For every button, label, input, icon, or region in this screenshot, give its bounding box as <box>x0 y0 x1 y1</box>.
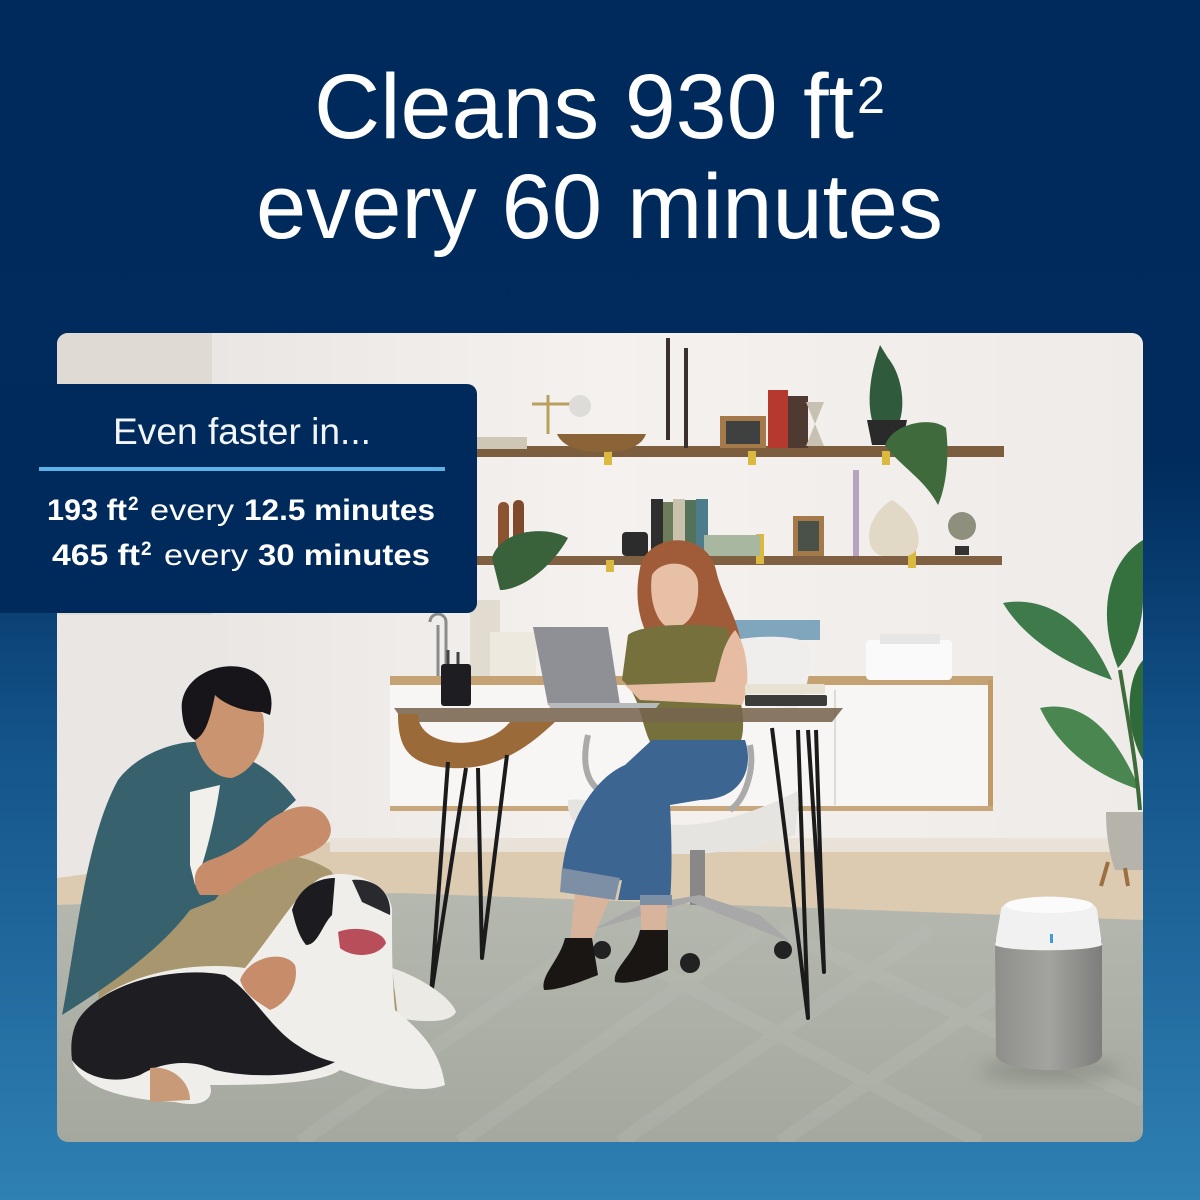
lower shelf <box>477 556 1002 565</box>
books on desk <box>745 684 827 706</box>
air purifier <box>980 896 1120 1080</box>
title <box>256 56 943 258</box>
callout line 1: every <box>150 494 234 527</box>
shelf decor: lower <box>492 470 976 590</box>
callout line 1: 193 ft <box>47 494 127 527</box>
man <box>62 666 456 1021</box>
callout line 1: 2 <box>128 494 139 515</box>
callout panel <box>0 384 477 613</box>
plant pot <box>1101 812 1143 886</box>
woman <box>560 540 748 945</box>
callout divider <box>39 467 445 471</box>
rug <box>57 893 1143 1142</box>
desk <box>394 708 843 1018</box>
office chair <box>568 637 810 973</box>
plant <box>1003 540 1143 810</box>
callout line 2: every <box>164 539 248 572</box>
title: 2 <box>857 67 885 125</box>
dog <box>71 874 445 1104</box>
shelves <box>477 446 1004 572</box>
shelf decor: upper <box>477 338 947 505</box>
woman's shoes <box>543 930 668 990</box>
laptop <box>533 627 660 708</box>
printer <box>866 634 952 680</box>
callout line 2 <box>52 539 430 572</box>
cabinet <box>390 676 993 811</box>
callout line 2: 30 minutes <box>258 539 430 572</box>
title: every 60 minutes <box>256 156 943 258</box>
upper shelf <box>477 446 1004 457</box>
binders and papers <box>470 600 820 676</box>
panel: room photo illustration <box>57 333 1143 1142</box>
callout line 1: 12.5 minutes <box>244 494 435 527</box>
callout heading: Even faster in... <box>113 411 371 452</box>
wall <box>57 333 1143 893</box>
pen cup <box>441 650 471 706</box>
title: Cleans 930 ft <box>314 56 854 158</box>
callout line 2: 465 ft <box>52 539 140 572</box>
paperclip wall art <box>430 614 446 680</box>
callout line 1 <box>47 494 435 527</box>
callout line 2: 2 <box>141 539 152 560</box>
wood floor <box>57 842 1143 925</box>
